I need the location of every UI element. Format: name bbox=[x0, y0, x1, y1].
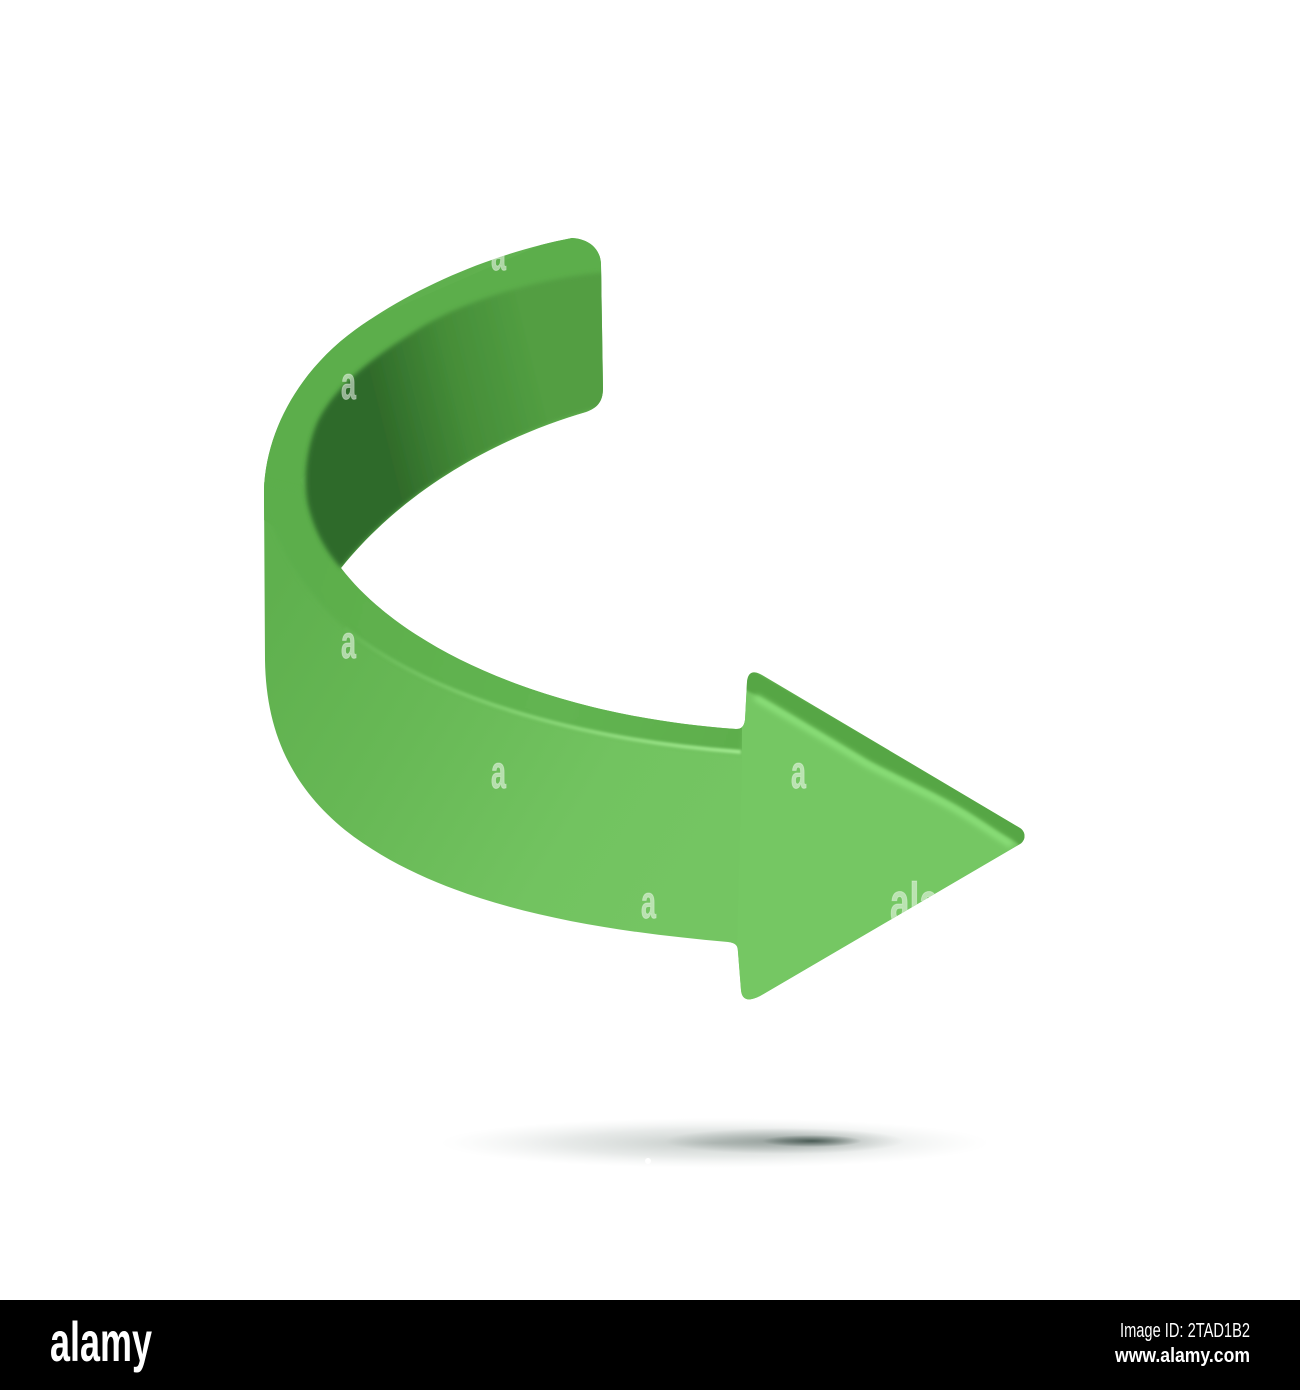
band highlight line bbox=[374, 648, 742, 755]
website url: www.alamy.com bbox=[1114, 1345, 1250, 1367]
footer bar bbox=[0, 1300, 1300, 1390]
curved green arrow bbox=[255, 228, 1032, 1006]
arrow body silhouette bbox=[264, 238, 1024, 999]
watermark letters: a bbox=[341, 616, 356, 668]
arrow head top bevel bbox=[746, 672, 1024, 845]
top rim of curved band bbox=[264, 238, 602, 520]
arrow head highlight bbox=[755, 697, 1012, 845]
watermark letters: alam bbox=[890, 871, 970, 935]
image id: Image ID: 2TAD1B2 bbox=[1120, 1320, 1250, 1342]
watermark letters: a bbox=[491, 746, 506, 798]
inside of curved band bbox=[306, 272, 612, 568]
watermark letters: a bbox=[791, 746, 806, 798]
watermark letters: a bbox=[341, 357, 356, 409]
watermark letters: a bbox=[491, 228, 506, 280]
shaded details bbox=[255, 228, 1032, 1006]
ground shadow bbox=[440, 1118, 990, 1168]
arrow head face bbox=[737, 690, 1030, 1006]
footer logo: alamy bbox=[50, 1310, 152, 1373]
watermark letters: a bbox=[641, 876, 656, 928]
lower rim of curved band bbox=[258, 480, 745, 753]
watermark letters bbox=[342, 256, 934, 919]
